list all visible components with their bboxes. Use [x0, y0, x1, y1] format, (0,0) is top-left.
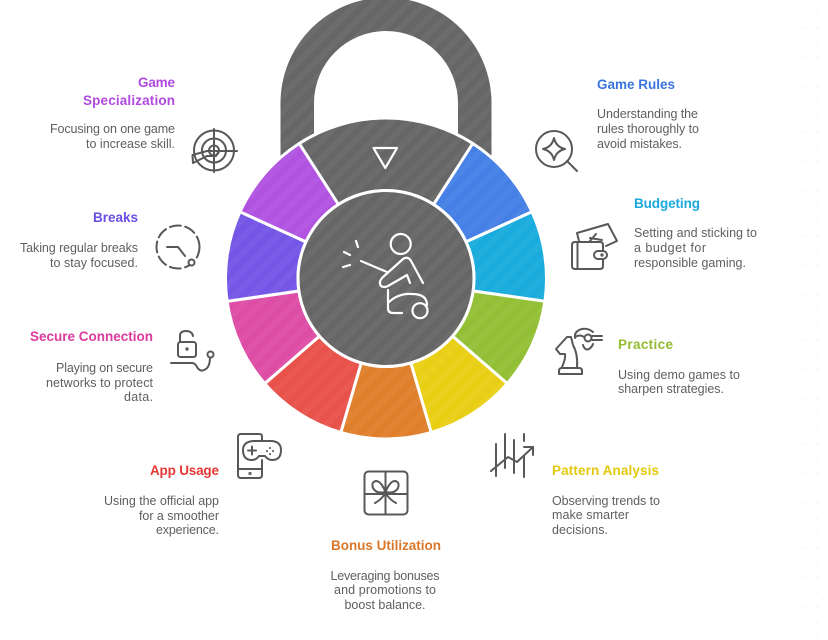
block: Practice: sharpen strategies. [618, 382, 724, 396]
block: App Usage: App Usage [150, 463, 219, 478]
segment: Secure Connection [227, 291, 320, 384]
block: Bonus Utilization: Bonus Utilization [331, 538, 441, 553]
segment: top keyhole [299, 118, 473, 204]
segment: Game Rules [434, 144, 532, 242]
lock wheel [225, 118, 547, 439]
block: Breaks [20, 210, 138, 270]
block: Budgeting: a budget for [634, 241, 706, 255]
block: Game Rules: Understanding the [597, 107, 698, 121]
block: Game Rules [597, 77, 699, 151]
block: Secure Connection: Secure Connection [30, 329, 153, 344]
block: Game Specialization [50, 75, 175, 151]
icon: dashed clock [156, 226, 200, 268]
icon: gift box [364, 472, 408, 514]
block: Bonus Utilization: and promotions to [334, 583, 436, 597]
block: Practice [618, 337, 740, 396]
block: Game Rules: avoid mistakes. [597, 137, 682, 151]
block: Budgeting: Budgeting [634, 196, 700, 211]
segment: Pattern Analysis [411, 336, 507, 432]
segment: App Usage [265, 336, 361, 432]
center hub [298, 190, 474, 366]
block: Breaks: to stay focused. [50, 256, 138, 270]
block: Game Specialization: Focusing on one game [50, 122, 175, 136]
block: App Usage: for a smoother [139, 509, 219, 523]
segment: Budgeting [466, 212, 547, 301]
block: Secure Connection: networks to protect [46, 376, 154, 390]
icon: magnifier with star [536, 131, 577, 171]
icon: trend chart [491, 434, 533, 477]
block: Game Specialization: to increase skill. [86, 137, 175, 151]
icon: chess knight and gear [556, 329, 602, 374]
block: Pattern Analysis [552, 463, 660, 537]
icon: wallet with banknote [572, 224, 617, 269]
block: Bonus Utilization [330, 538, 441, 612]
block: Secure Connection: Playing on secure [56, 361, 153, 375]
block: Secure Connection [30, 329, 154, 404]
segment: Game Specialization [240, 144, 338, 242]
segment: Bonus Utilization [341, 363, 431, 439]
icon: player with ball [343, 234, 428, 318]
block: Bonus Utilization: Leveraging bonuses [330, 569, 440, 583]
block: Breaks: Taking regular breaks [20, 241, 138, 255]
block: Practice: Using demo games to [618, 368, 740, 382]
block: Pattern Analysis: decisions. [552, 523, 608, 537]
block: Budgeting: responsible gaming. [634, 256, 746, 270]
block: Game Rules: rules thoroughly to [597, 122, 699, 136]
segment: Breaks [225, 212, 306, 301]
block: Game Specialization: Specialization [83, 93, 175, 108]
block: Breaks: Breaks [93, 210, 138, 225]
lock shackle [280, 0, 492, 156]
block: App Usage: Using the official app [104, 494, 219, 508]
block: Budgeting: Setting and sticking to [634, 226, 757, 240]
segment: Practice [452, 291, 545, 384]
block: Practice: Practice [618, 337, 673, 352]
block: Pattern Analysis: Pattern Analysis [552, 463, 659, 478]
block: Game Rules: Game Rules [597, 77, 675, 92]
icon: padlock with cable [171, 331, 214, 371]
block: Secure Connection: data. [124, 390, 153, 404]
block: Game Specialization: Game [138, 75, 175, 90]
block: Budgeting [634, 196, 757, 270]
block: App Usage: experience. [156, 523, 219, 537]
block: App Usage [104, 463, 219, 537]
icon: target [192, 129, 237, 172]
block: Pattern Analysis: Observing trends to [552, 494, 660, 508]
block: Bonus Utilization: boost balance. [344, 598, 426, 612]
icon: phone and gamepad [238, 434, 281, 478]
block: Pattern Analysis: make smarter [552, 508, 629, 522]
